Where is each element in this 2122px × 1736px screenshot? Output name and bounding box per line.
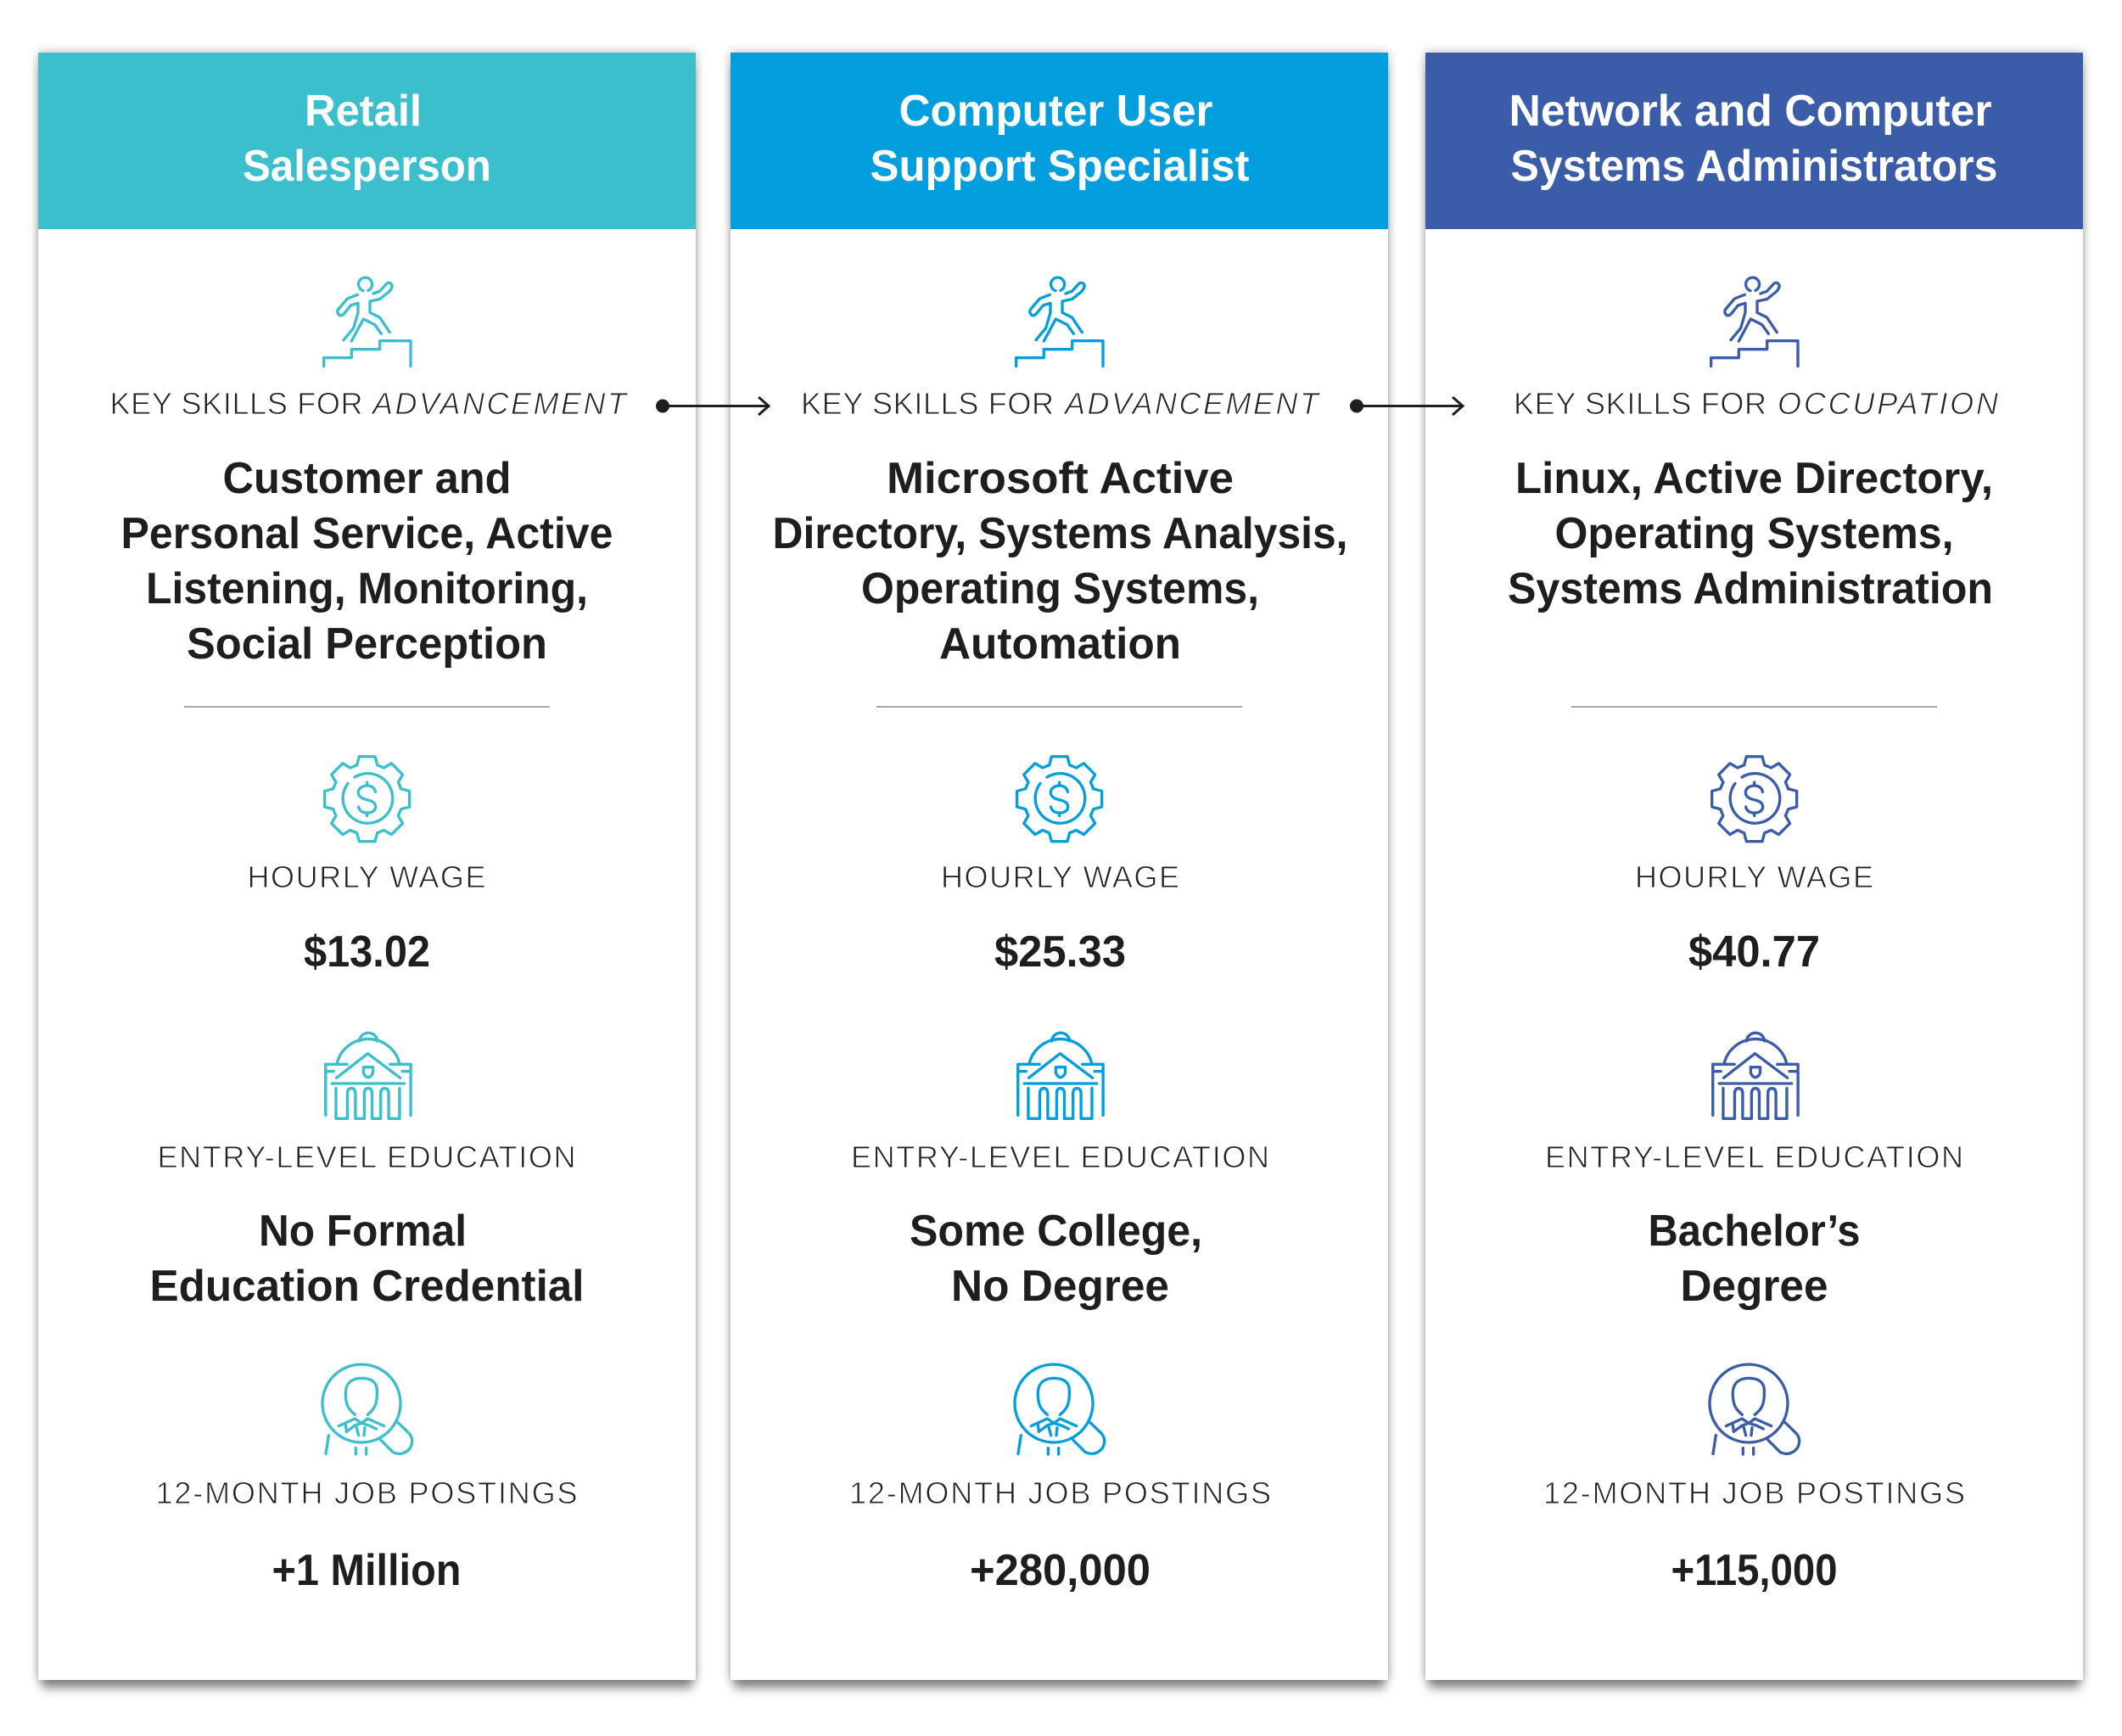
heading: Salesperson bbox=[243, 142, 491, 191]
icon: person climbing stairs bbox=[1711, 277, 1798, 367]
heading bbox=[243, 87, 491, 191]
panel: Network and Computer Systems Administrators bbox=[1425, 53, 2083, 1680]
value: job postings: +280,000 bbox=[970, 1546, 1151, 1595]
text: education value bbox=[1648, 1207, 1860, 1311]
icon: magnifier over person bbox=[322, 1364, 412, 1454]
label: job postings: 12-MONTH JOB POSTINGS bbox=[1543, 1476, 1965, 1510]
text: skills list: Operating Systems, bbox=[1554, 509, 1953, 558]
text: education value: No Degree bbox=[951, 1262, 1169, 1311]
icon: dollar gear bbox=[1712, 757, 1797, 842]
text: skills list: Systems Administration bbox=[1508, 564, 1993, 613]
label: education: ENTRY-LEVEL EDUCATION bbox=[1545, 1140, 1963, 1174]
icon: dollar gear bbox=[1017, 757, 1102, 842]
text: skills list: Linux, Active Directory, bbox=[1515, 454, 1993, 503]
value: wage: $40.77 bbox=[1688, 927, 1820, 977]
text: skills list: Social Perception bbox=[187, 619, 547, 669]
arrow: retail to support specialist bbox=[656, 396, 770, 416]
heading: Computer User bbox=[899, 87, 1213, 136]
icon: institution building bbox=[1713, 1033, 1798, 1118]
label: education: ENTRY-LEVEL EDUCATION bbox=[158, 1140, 575, 1174]
text: education value: Bachelor’s bbox=[1648, 1207, 1860, 1256]
text: skills list bbox=[1508, 454, 1993, 613]
label: key skills: KEY SKILLS FOR bbox=[1514, 386, 1766, 421]
icon: person climbing stairs bbox=[1016, 277, 1103, 367]
heading bbox=[1509, 87, 1997, 191]
text: skills list: Microsoft Active bbox=[887, 454, 1234, 503]
text: education value: Degree bbox=[1680, 1262, 1828, 1311]
icon: institution building bbox=[326, 1033, 411, 1118]
text: skills list: Directory, Systems Analysis, bbox=[772, 509, 1347, 558]
label: key skills bbox=[801, 386, 1321, 421]
heading: Systems Administrators bbox=[1510, 142, 1997, 191]
icon: dollar gear bbox=[325, 757, 410, 842]
heading bbox=[871, 87, 1249, 191]
header band bbox=[1425, 53, 2083, 229]
text: education value bbox=[149, 1207, 584, 1311]
label: job postings: 12-MONTH JOB POSTINGS bbox=[849, 1476, 1271, 1510]
text: skills list: Automation bbox=[939, 619, 1181, 669]
header band bbox=[731, 53, 1388, 229]
text: skills list: Personal Service, Active bbox=[120, 509, 613, 558]
header band bbox=[38, 53, 696, 229]
label: key skills: ADVANCEMENT bbox=[371, 386, 629, 421]
text: education value: No Formal bbox=[259, 1207, 467, 1256]
arrow: support specialist to administrators bbox=[1350, 396, 1464, 416]
panel: Retail Salesperson bbox=[38, 53, 696, 1680]
heading: Support Specialist bbox=[871, 142, 1249, 191]
icon: magnifier over person bbox=[1710, 1364, 1800, 1454]
label: key skills: KEY SKILLS FOR bbox=[110, 386, 363, 421]
label: key skills: OCCUPATION bbox=[1778, 386, 1999, 421]
text: skills list: Customer and bbox=[222, 454, 511, 503]
value: wage: $13.02 bbox=[304, 927, 430, 977]
value: job postings: +115,000 bbox=[1671, 1546, 1838, 1595]
value: job postings: +1 Million bbox=[272, 1546, 462, 1595]
label: hourly wage: HOURLY WAGE bbox=[1635, 860, 1873, 894]
text: education value: Education Credential bbox=[149, 1262, 584, 1311]
label: key skills: KEY SKILLS FOR bbox=[801, 386, 1054, 421]
value: wage: $25.33 bbox=[994, 927, 1126, 977]
text: education value bbox=[910, 1207, 1202, 1311]
icon: person climbing stairs bbox=[324, 277, 411, 367]
text: skills list bbox=[772, 454, 1347, 669]
panel: Computer User Support Specialist bbox=[731, 53, 1388, 1680]
heading: Retail bbox=[305, 87, 422, 136]
text: skills list: Listening, Monitoring, bbox=[146, 564, 588, 613]
label: key skills bbox=[1514, 386, 1999, 421]
text: skills list bbox=[120, 454, 613, 669]
label: hourly wage: HOURLY WAGE bbox=[941, 860, 1179, 894]
label: key skills bbox=[110, 386, 629, 421]
icon: magnifier over person bbox=[1015, 1364, 1105, 1454]
label: key skills: ADVANCEMENT bbox=[1063, 386, 1321, 421]
label: education: ENTRY-LEVEL EDUCATION bbox=[851, 1140, 1269, 1174]
heading: Network and Computer bbox=[1509, 87, 1992, 136]
label: hourly wage: HOURLY WAGE bbox=[248, 860, 485, 894]
icon: institution building bbox=[1018, 1033, 1103, 1118]
text: skills list: Operating Systems, bbox=[861, 564, 1259, 613]
label: job postings: 12-MONTH JOB POSTINGS bbox=[156, 1476, 577, 1510]
text: education value: Some College, bbox=[910, 1207, 1202, 1256]
